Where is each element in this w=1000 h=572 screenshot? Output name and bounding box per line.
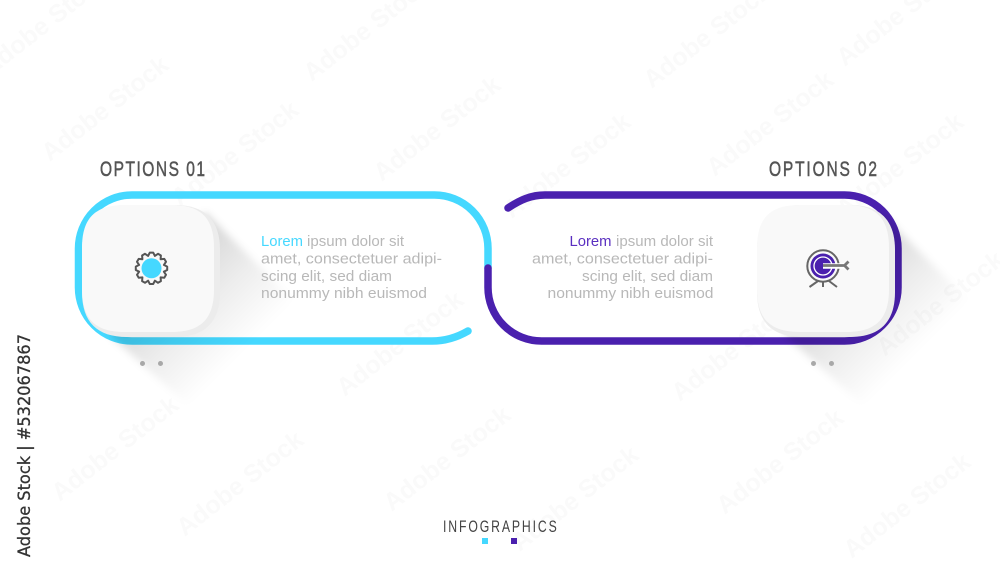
background watermark: Adobe Stock — [831, 108, 969, 224]
text block: options 02: scing elit, sed diam — [582, 268, 713, 285]
background watermark: Adobe Stock — [498, 108, 636, 224]
background watermark: Adobe Stock — [331, 286, 469, 402]
text block: options 02: amet, consectetuer adipi- — [532, 250, 713, 268]
background watermark: Adobe Stock — [166, 96, 304, 212]
background watermark: Adobe Stock — [838, 448, 976, 564]
background watermark: Adobe Stock — [666, 291, 804, 407]
text block: options 01: scing elit, sed diam — [261, 268, 392, 285]
panel: options 02 — [488, 157, 975, 430]
text block: options 02: nonummy nibh euismod — [548, 285, 714, 302]
icon: target with arrow — [807, 250, 848, 287]
heading: options 01: OPTIONS 01 — [100, 157, 205, 181]
pagination dots 02 — [811, 361, 834, 366]
card 01 — [82, 205, 220, 337]
text block: options 01: Lorem — [261, 233, 303, 250]
background watermark: Adobe Stock — [171, 426, 309, 542]
card 02 — [757, 205, 895, 337]
background watermark: Adobe Stock — [711, 404, 849, 520]
pagination dots 01 — [140, 361, 163, 366]
panel: options 01 — [78, 157, 488, 430]
text block: options 01: ipsum dolor sit — [307, 233, 405, 250]
background watermark: Adobe Stock — [46, 391, 184, 507]
background watermark: Adobe Stock — [506, 441, 644, 557]
outline: cyan rounded frame — [78, 195, 488, 341]
text block: options 01: nonummy nibh euismod — [261, 285, 427, 302]
outline: purple rounded frame — [488, 195, 898, 341]
background watermark: Adobe Stock — [368, 71, 506, 187]
text block: options 01: amet, consectetuer adipi- — [261, 250, 442, 268]
long shadow of card 02 — [785, 212, 975, 430]
heading: options 02: OPTIONS 02 — [769, 157, 877, 181]
stock id label: Adobe Stock | #532067867 — [15, 334, 35, 557]
text block: options 02: Lorem — [570, 233, 612, 250]
long shadow of card 01 — [110, 212, 300, 430]
text block: options 01 — [261, 233, 442, 302]
text block: options 02: ipsum dolor sit — [616, 233, 714, 250]
icon: gear — [136, 253, 167, 284]
text block: options 02 — [532, 233, 714, 302]
background watermark: Adobe Stock — [701, 66, 839, 182]
background watermark: Adobe Stock — [36, 51, 174, 167]
background watermark: Adobe Stock — [378, 401, 516, 517]
footer title: INFOGRAPHICS — [443, 518, 557, 537]
